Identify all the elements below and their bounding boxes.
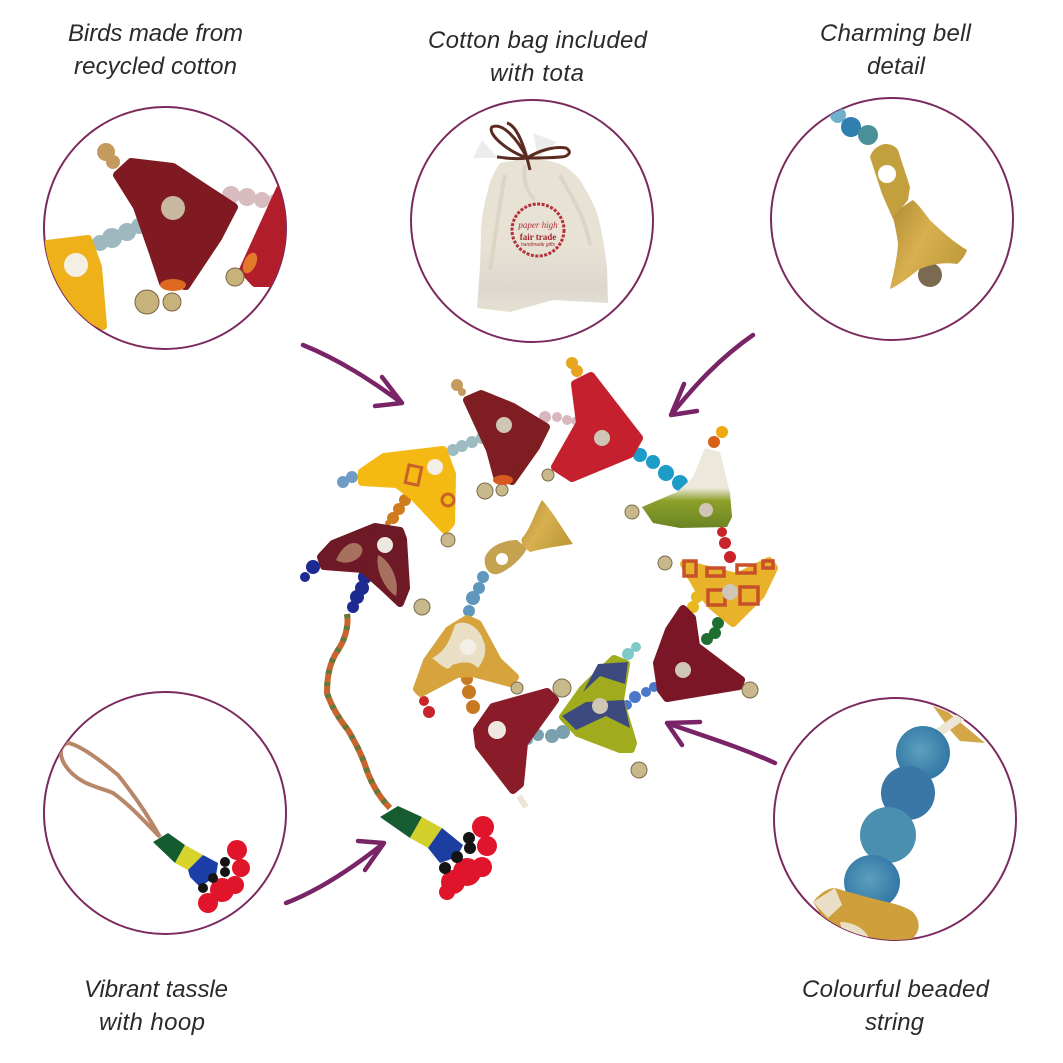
heading: birds made from recycled cotton xyxy=(68,20,243,80)
panel: tassel circle xyxy=(44,692,286,934)
panel: bird close-up circle xyxy=(44,107,286,349)
patch: orange on red bird xyxy=(242,252,258,274)
braided cord xyxy=(327,614,390,808)
bird: mustard floral xyxy=(417,619,515,693)
arrow: to bell xyxy=(671,335,753,415)
panel: beaded string circle xyxy=(774,698,1016,945)
bird: maroon right xyxy=(657,609,741,698)
bell: gold centre xyxy=(485,500,573,574)
arrow: to beads xyxy=(667,722,775,763)
fabric bird: red xyxy=(243,189,286,283)
heading: vibrant tassle with hoop xyxy=(84,976,228,1036)
beads: pink string xyxy=(222,186,283,210)
bird: maroon floral xyxy=(321,527,406,603)
tip: cream thread xyxy=(519,796,526,807)
beads: amber top xyxy=(97,143,120,169)
small bells xyxy=(414,469,758,778)
tassel xyxy=(380,806,497,900)
arrow: to tassel xyxy=(286,841,384,903)
bells: maroon bird xyxy=(135,290,181,314)
garland: central product photo xyxy=(300,357,774,900)
sequin: yellow bird xyxy=(64,253,88,277)
string xyxy=(873,148,874,151)
cloth ears xyxy=(473,133,557,158)
glass beads xyxy=(844,726,950,909)
arrow: to birds xyxy=(303,345,402,406)
stamp: fair trade: paper high xyxy=(517,220,558,230)
bird: green and blue xyxy=(562,659,633,749)
patch: orange on dark red bird xyxy=(493,475,513,485)
bell: red bird xyxy=(226,268,244,286)
heading: colourful beaded string: Colourful beaded xyxy=(802,976,990,1003)
brown bow tie xyxy=(491,123,569,170)
patch: orange xyxy=(160,279,186,291)
bag folds xyxy=(490,165,590,270)
fabric bird: yellow xyxy=(47,239,103,326)
fabric cream pattern xyxy=(813,888,868,937)
heading: charming bell detail: Charming bell xyxy=(820,20,972,47)
bird: yellow with red squares xyxy=(684,561,774,623)
beads: pale blue string xyxy=(92,218,147,251)
heading: colourful beaded string xyxy=(802,976,990,1036)
sequin: maroon bird xyxy=(161,196,185,220)
heading: charming bell detail: detail xyxy=(867,53,926,80)
heading: cotton bag included xyxy=(428,27,648,87)
cotton bag xyxy=(477,158,608,312)
stamp: fair trade xyxy=(512,204,564,256)
stamp: fair trade: handmade gifts xyxy=(521,242,556,248)
stamp: fair trade: fair trade xyxy=(520,232,556,242)
heading: cotton bag included: Cotton bag included xyxy=(428,27,648,54)
sequins xyxy=(377,417,738,739)
hoop cord xyxy=(61,743,160,837)
heading: cotton bag included: with tota xyxy=(490,60,584,87)
panel: cotton bag circle xyxy=(411,100,653,342)
heading: colourful beaded string: string xyxy=(865,1009,925,1036)
bird: green and white xyxy=(642,448,732,528)
tassel head xyxy=(153,833,250,913)
heading: charming bell detail xyxy=(820,20,972,80)
fabric bird: maroon xyxy=(117,162,234,286)
bird: red xyxy=(555,376,639,478)
heading: birds made from recycled cotton: recycled cotton xyxy=(74,53,237,80)
brass bell xyxy=(870,144,967,289)
blue beads xyxy=(830,107,878,145)
heading: vibrant tassle with hoop: Vibrant tassle xyxy=(84,976,228,1003)
bird: maroon lower xyxy=(477,692,555,790)
bird: yellow xyxy=(362,450,454,530)
panel: bell circle xyxy=(771,98,1013,340)
bottom fabric xyxy=(813,888,919,945)
top fabric and string xyxy=(933,706,985,743)
heading: vibrant tassle with hoop: with hoop xyxy=(99,1009,205,1036)
beads: connecting strings xyxy=(300,357,736,745)
heading: birds made from recycled cotton: Birds made from xyxy=(68,20,243,47)
bird: dark red xyxy=(467,394,546,481)
